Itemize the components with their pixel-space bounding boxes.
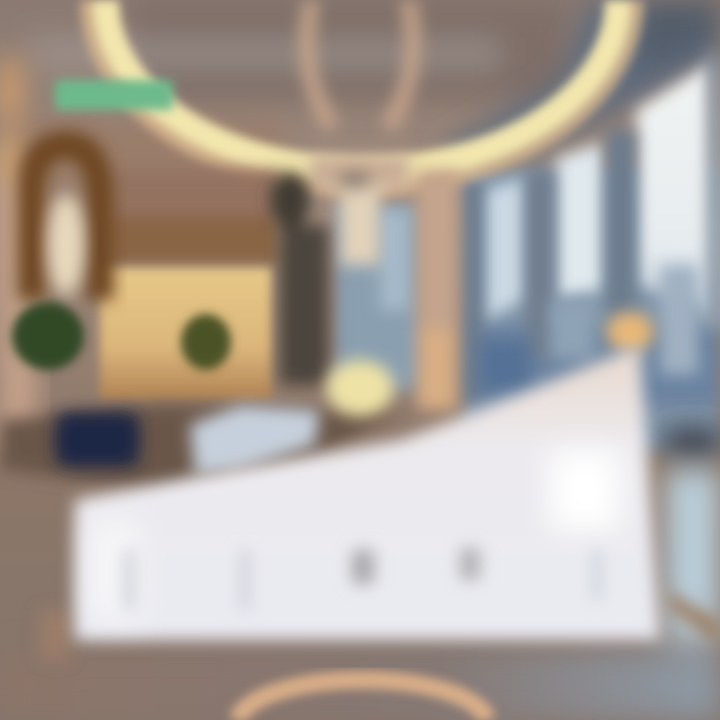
white counter xyxy=(75,345,660,640)
green exit sign xyxy=(55,80,173,110)
left plant xyxy=(12,302,84,370)
windows xyxy=(380,62,720,330)
ring light xyxy=(98,0,626,178)
wooden wall xyxy=(105,170,280,265)
floor ring reflection xyxy=(238,680,487,720)
orange counter tip xyxy=(606,312,654,352)
ceiling background xyxy=(0,0,570,190)
right plant xyxy=(181,314,231,370)
counter vertical seams xyxy=(124,548,602,610)
left wall xyxy=(0,54,36,450)
dark column xyxy=(270,172,328,385)
white cushions xyxy=(190,405,320,475)
floor xyxy=(0,428,720,720)
yellow wall panel xyxy=(100,268,272,400)
seating area shadow xyxy=(0,405,400,490)
floor reflection xyxy=(40,590,720,660)
distant towers xyxy=(480,265,698,390)
wooden arch xyxy=(32,145,100,300)
window mullions xyxy=(462,50,720,400)
globe lamp xyxy=(326,360,394,416)
counter highlights xyxy=(90,450,620,620)
arch window xyxy=(48,195,84,295)
chandelier xyxy=(307,0,413,265)
city view behind windows xyxy=(335,170,720,450)
large column xyxy=(416,170,458,410)
grey-blue ceiling on the right xyxy=(440,0,720,180)
navy sofa xyxy=(55,412,140,467)
